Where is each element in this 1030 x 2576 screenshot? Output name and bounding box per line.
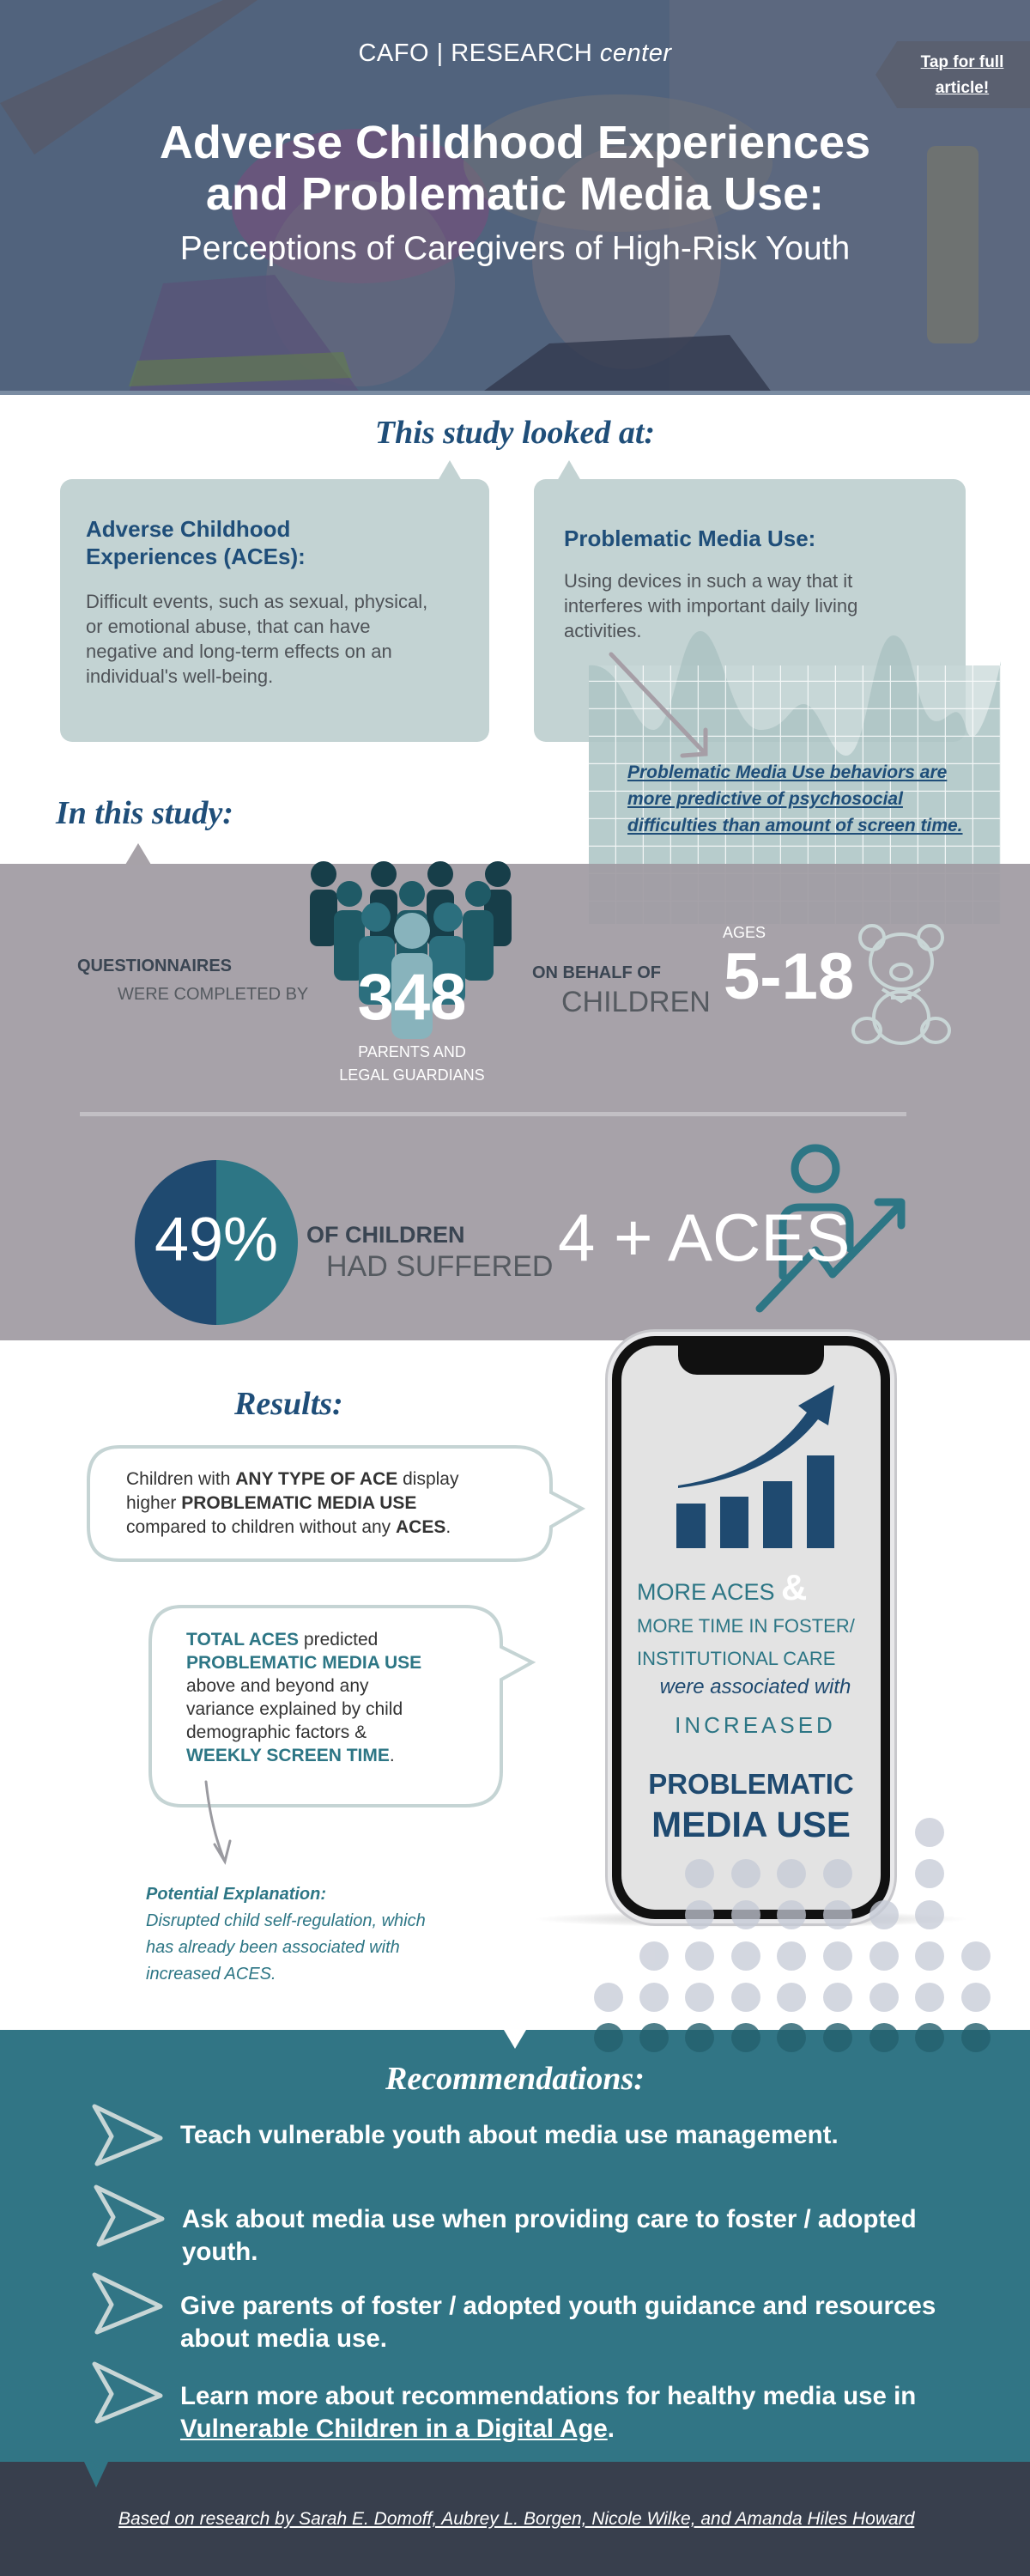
tap for full article button: Tap for full xyxy=(921,53,1003,71)
pointer xyxy=(557,460,581,481)
footer xyxy=(0,2462,1030,2576)
icon: chevron xyxy=(93,2361,163,2423)
heading: results: Results: xyxy=(234,1386,343,1422)
item 4 xyxy=(93,2361,916,2443)
title: and Problematic Media Use: xyxy=(206,168,824,220)
tap for full article button: article! xyxy=(936,79,989,97)
pointer xyxy=(84,2462,108,2488)
callout: bubble total ACES: WEEKLY SCREEN TIME. xyxy=(186,1746,395,1765)
pointer xyxy=(504,2030,526,2049)
panel: recommendations xyxy=(0,2030,1030,2463)
PMU heading: Problematic Media Use: xyxy=(564,526,815,551)
ACE body: Difficult events, such as sexual, physical, or emotional abuse, that can have negative and long-term effects on an individual's well-being. xyxy=(86,591,427,687)
divider xyxy=(80,1112,906,1116)
text: potential explanation: increased ACES. xyxy=(146,1965,276,1984)
icon: smartphone with results: MEDIA USE xyxy=(651,1804,851,1844)
chart: rising bars with arrow xyxy=(676,1385,834,1548)
panel: ACEs definition xyxy=(60,479,489,742)
callout: bubble total ACES: above and beyond any xyxy=(186,1676,369,1696)
dot pattern xyxy=(594,1818,991,2052)
text: of children had suffered: OF CHILDREN xyxy=(306,1222,465,1248)
text: parents and legal guardians: PARENTS AND xyxy=(358,1043,466,1060)
item 4: Learn more about recommendations for healthy media use in Vulnerable Children in a Digital Age. xyxy=(180,2382,916,2443)
callout: bubble total ACES xyxy=(148,1605,536,1807)
arrow: down to potential explanation xyxy=(204,1781,232,1865)
pointer xyxy=(125,843,151,865)
item 2 xyxy=(94,2184,917,2266)
title: Adverse Childhood Experiences xyxy=(160,117,870,168)
chart: 49% pie xyxy=(135,1160,298,1325)
text: potential explanation xyxy=(146,1885,426,1984)
text: questionnaires: QUESTIONNAIRES xyxy=(77,957,232,975)
icon: teddy bear xyxy=(851,924,951,1045)
ACE heading xyxy=(86,516,306,569)
ACE heading: Experiences (ACEs): xyxy=(86,544,306,569)
heading: recommendations: Recommendations: xyxy=(385,2061,645,2097)
panel: study stats (gray): HAD SUFFERED xyxy=(326,1250,553,1283)
phone shadow xyxy=(532,1911,970,1928)
chart: grid wave graphic xyxy=(589,631,1001,864)
text: potential explanation: Disrupted child self-regulation, which xyxy=(146,1911,426,1930)
text: potential explanation: has already been associated with xyxy=(146,1938,400,1957)
item 3 xyxy=(93,2272,936,2353)
icon: smartphone with results: INCREASED xyxy=(675,1712,836,1738)
icon: smartphone with results: were associated with xyxy=(660,1675,851,1698)
text: more aces & more time in foster care: MORE ACES & xyxy=(637,1567,807,1607)
logo: CAFO | RESEARCH center xyxy=(358,39,672,67)
heading: this study looked at: This study looked at: xyxy=(375,415,655,451)
icon: chevron xyxy=(93,2104,163,2166)
icon: smartphone with results xyxy=(563,1329,988,2030)
tap for full article button xyxy=(876,41,1030,108)
panel: study stats (gray): 5-18 xyxy=(724,940,854,1013)
PMU body: Using devices in such a way that it interferes with important daily living activities. xyxy=(564,570,857,641)
callout: bubble any type of ACE: Children with ANY TYPE OF ACE display higher PROBLEMATIC MEDIA USE compared to children without any ACES. xyxy=(126,1469,458,1537)
icon: people group xyxy=(310,861,512,1039)
text: parents and legal guardians: LEGAL GUARDIANS xyxy=(339,1066,485,1084)
callout: bubble total ACES: TOTAL ACES predicted xyxy=(186,1630,378,1649)
callout: bubble any type of ACE xyxy=(87,1445,585,1562)
icon: smartphone with results: PROBLEMATIC xyxy=(648,1768,854,1800)
text: on behalf of children: ON BEHALF OF xyxy=(532,963,661,982)
subtitle: Perceptions of Caregivers of High-Risk Youth xyxy=(180,230,850,267)
text: were completed by: WERE COMPLETED BY xyxy=(118,985,308,1004)
hero banner xyxy=(0,0,1030,393)
stat: 348: 348 xyxy=(358,961,466,1034)
pointer xyxy=(438,460,462,481)
stat: 4 + ACES: 4 + ACES xyxy=(558,1200,850,1275)
heading: in this study: In this study: xyxy=(56,795,233,831)
text: parents and legal guardians xyxy=(339,1043,485,1084)
chart: 49% pie: 49% xyxy=(154,1206,278,1274)
panel: problematic media use definition xyxy=(534,479,966,742)
icon: smartphone with results: INSTITUTIONAL CARE xyxy=(637,1648,835,1669)
callout: PMU link text: Problematic Media Use behaviors are more predictive of psychosocial difficulties than amount of screen time. xyxy=(627,762,963,835)
icon: chevron xyxy=(93,2272,163,2334)
icon: chevron xyxy=(94,2184,165,2246)
callout: bubble total ACES: PROBLEMATIC MEDIA USE xyxy=(186,1653,421,1673)
item 3: Give parents of foster / adopted youth guidance and resources about media use. xyxy=(180,2292,936,2353)
item 1 xyxy=(93,2104,839,2166)
callout: bubble total ACES: demographic factors & xyxy=(186,1722,367,1742)
panel: study stats (gray): CHILDREN xyxy=(561,986,711,1018)
credits: Based on research by Sarah E. Domoff, Aubrey L. Borgen, Nicole Wilke, and Amanda Hiles Howard xyxy=(118,2509,914,2529)
ACE heading: Adverse Childhood xyxy=(86,516,290,542)
item 2: Ask about media use when providing care to foster / adopted youth. xyxy=(182,2205,917,2266)
callout: bubble total ACES: variance explained by child xyxy=(186,1699,403,1719)
panel: study stats (gray) xyxy=(0,864,1030,1340)
hero photo approximation xyxy=(0,0,1030,391)
stat: ages 5-18: AGES xyxy=(723,924,766,941)
text: potential explanation: Potential Explanation: xyxy=(146,1885,326,1904)
title xyxy=(160,117,870,220)
arrow: grey diagonal pointer xyxy=(609,653,707,757)
icon: person with rising arrow xyxy=(755,1144,905,1312)
item 1: Teach vulnerable youth about media use management. xyxy=(180,2121,839,2149)
icon: smartphone with results: MORE TIME IN FOSTER/ xyxy=(637,1615,855,1637)
